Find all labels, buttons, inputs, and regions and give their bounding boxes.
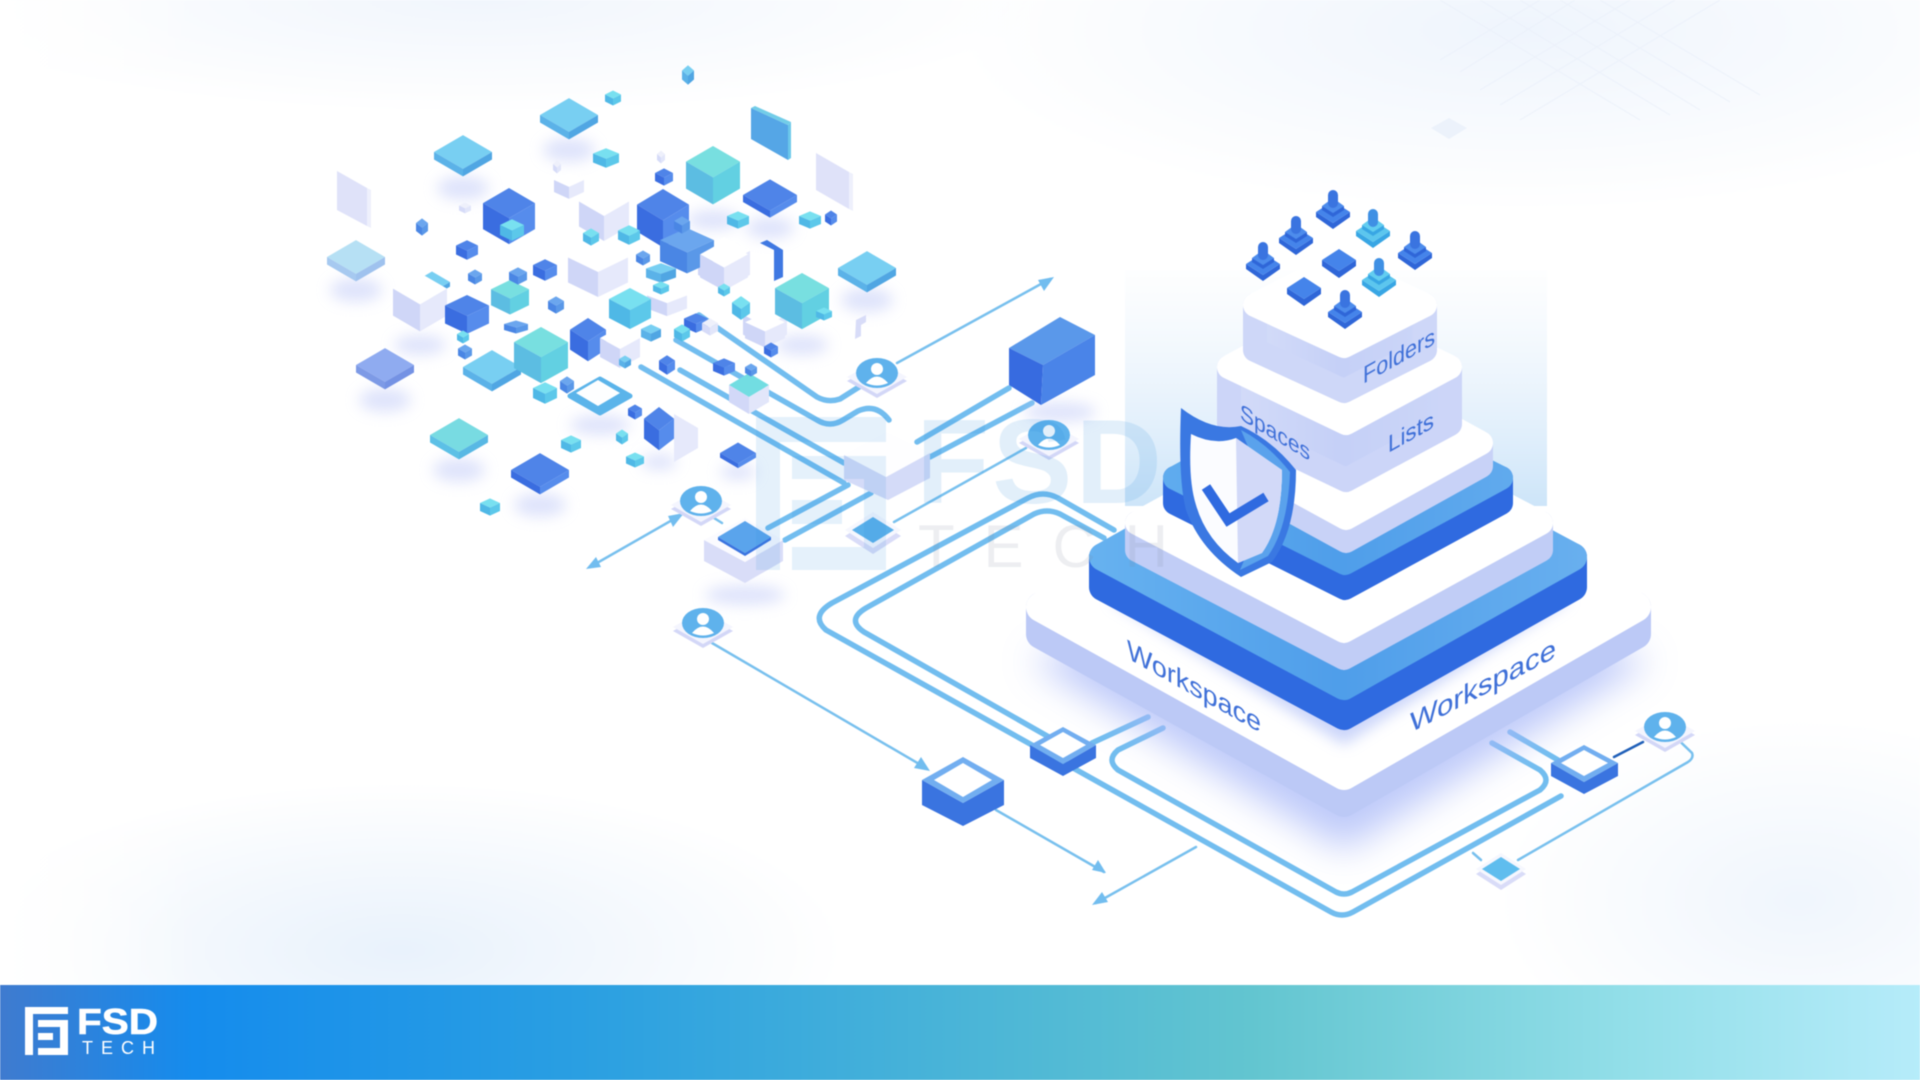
- data cluster: flat tiles: [327, 98, 896, 494]
- node grid on top of the stack: [1246, 190, 1432, 329]
- arrowheads: [586, 277, 1108, 905]
- connector lines around the workspace: [819, 494, 1561, 915]
- pyramid level: upper blue tier: [1175, 393, 1501, 588]
- label: workspace right: Workspace: [1410, 633, 1556, 740]
- shadow under pyramid base: [1030, 570, 1650, 850]
- pyramid level: spaces and lists: [1229, 311, 1450, 480]
- white box with blue tile: [704, 518, 783, 583]
- shadow under blue level: [1110, 500, 1570, 745]
- panel: backdrop glow behind the pyramid: [1125, 270, 1547, 506]
- footer logo icon: [25, 1007, 68, 1055]
- blue cube node on the lower line: [922, 757, 1004, 826]
- user icon nodes: [671, 358, 1695, 752]
- thin arrows and links: [590, 279, 1692, 903]
- small diamond nodes: [845, 512, 1526, 890]
- data cluster: blue plate: [751, 106, 791, 160]
- blue node on the right: [1551, 745, 1618, 794]
- data cluster: blue and teal cubes: [445, 146, 829, 462]
- pyramid level: blue tier: [1103, 428, 1573, 716]
- footer logo text: [77, 1001, 158, 1058]
- watermark: FSD Tech: TECH: [918, 513, 1168, 580]
- data cluster: small cubes: [416, 65, 837, 516]
- data cluster: white cubes: [393, 173, 787, 346]
- label: lists: Lists: [1388, 407, 1434, 459]
- connector lines from the data cluster: [641, 315, 1032, 540]
- soft shadows under the cubes: [330, 138, 1096, 605]
- watermark: FSD Tech: FSD: [916, 395, 1162, 529]
- watermark: FSD Tech: [756, 395, 1168, 580]
- central connector box: [844, 432, 930, 500]
- label: spaces: Spaces: [1240, 399, 1310, 467]
- footer logo text: TECH: [82, 1038, 155, 1058]
- data cluster: pale plates: [337, 153, 866, 339]
- label: folders: Folders: [1363, 323, 1435, 390]
- big blue cube: [1009, 317, 1095, 405]
- outlined tile: [570, 379, 630, 413]
- pyramid level: white tier: [1137, 415, 1541, 658]
- label: workspace left: Workspace: [1127, 635, 1261, 740]
- footer logo text: FSD: [77, 1001, 158, 1042]
- footer bar: [0, 985, 1920, 1080]
- blue node on the workspace line: [1030, 727, 1096, 776]
- icon: security shield: [1180, 408, 1296, 577]
- pyramid level: workspace base: [1041, 439, 1636, 802]
- pyramid level: folders: [1255, 264, 1425, 391]
- pyramid level: upper white tier: [1209, 368, 1481, 541]
